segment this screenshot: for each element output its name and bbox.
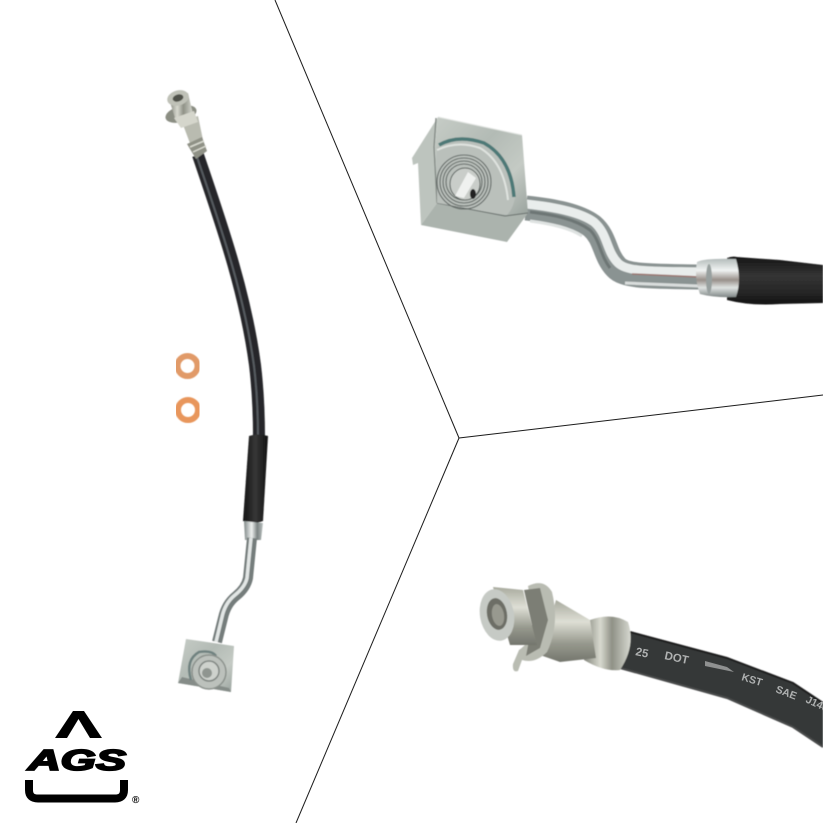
fitting body [540, 600, 596, 662]
copper washers [178, 356, 198, 420]
ferrule [244, 521, 263, 540]
steel tube bend [526, 204, 700, 286]
detail: threaded fitting and printed hose [476, 583, 823, 747]
full brake hose assembly [163, 88, 268, 692]
bolt flange [436, 174, 514, 215]
threaded socket [493, 587, 537, 645]
detail: mounting block and steel tube [412, 117, 823, 304]
AGS logo [26, 711, 140, 806]
heat sleeve [243, 434, 268, 523]
hose printing: KST [740, 671, 764, 689]
hose printing: DOT [663, 650, 690, 667]
concentric rings [437, 155, 491, 209]
top banjo fitting [163, 88, 207, 159]
steel tube [216, 538, 252, 642]
crimp collar [584, 616, 631, 670]
hose body [197, 155, 259, 438]
retaining clip [513, 583, 555, 671]
black hose [620, 632, 823, 747]
small mounting block [178, 639, 234, 692]
registered mark: ® [132, 795, 140, 806]
printed bar mark [705, 661, 734, 672]
washer 2 [178, 400, 198, 420]
logo base [29, 780, 124, 798]
logo chevron [55, 711, 102, 738]
panel divider lines [275, 0, 823, 823]
hose printing [634, 646, 823, 715]
ferrule [696, 259, 739, 297]
block faces [412, 117, 528, 242]
black hose end [727, 257, 823, 304]
washer 1 [178, 356, 198, 376]
hose printing: 25 [634, 646, 650, 661]
hose printing: SAE [774, 684, 798, 703]
logo wordmark: AGS [26, 745, 127, 777]
bolt bore [450, 168, 480, 200]
